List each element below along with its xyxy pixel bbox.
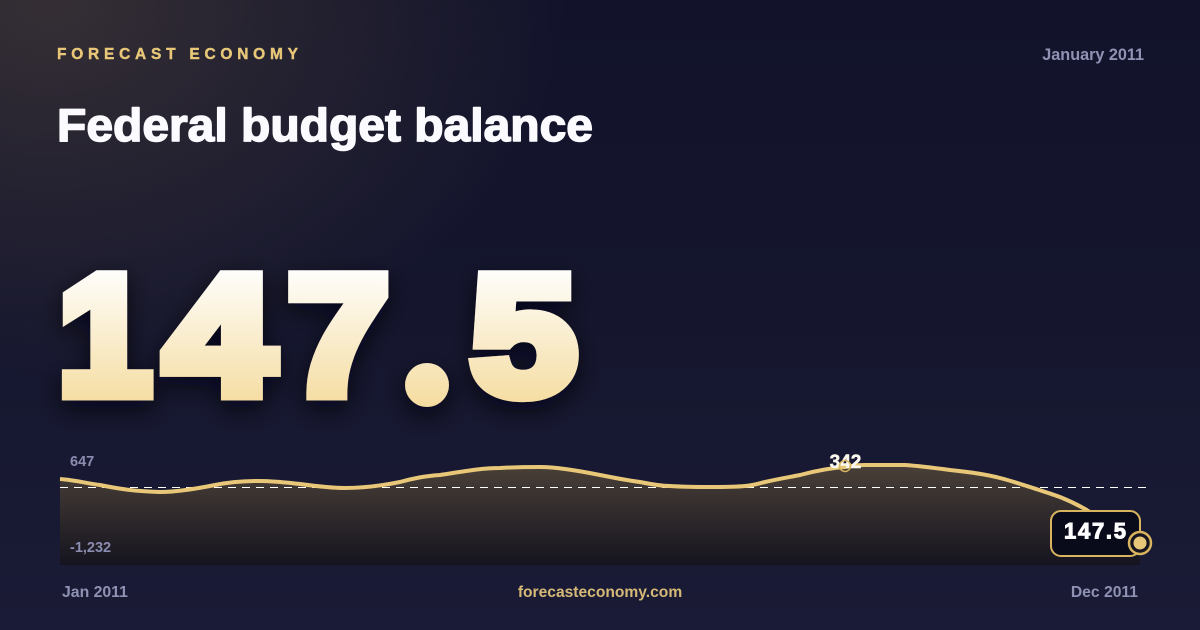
min axis label: -1,232 — [70, 540, 111, 556]
headline value: 1 — [58, 240, 151, 430]
end marker — [1129, 532, 1151, 554]
reference dashed line — [60, 486, 1147, 488]
title: Federal budget balance — [57, 99, 593, 151]
end date: Dec 2011 — [1071, 584, 1138, 601]
chart area fill — [60, 465, 1140, 565]
chart: budget balance sparkline — [60, 452, 1151, 565]
current value badge — [1051, 511, 1140, 556]
headline value: 5 — [471, 240, 576, 430]
headline value: . — [410, 286, 443, 420]
date label: January 2011 — [1042, 46, 1144, 64]
max axis label: 647 — [70, 454, 94, 470]
current value badge: 147.5 — [1064, 518, 1126, 544]
brand label: FORECAST ECONOMY — [57, 46, 299, 63]
start date: Jan 2011 — [62, 584, 128, 601]
headline value: 4 — [165, 240, 274, 430]
peak marker — [840, 460, 850, 472]
headline value — [58, 240, 576, 430]
headline value: 7 — [288, 240, 389, 430]
peak value: 342 — [830, 452, 861, 473]
chart line — [60, 465, 1140, 543]
source url: forecasteconomy.com — [518, 584, 682, 601]
